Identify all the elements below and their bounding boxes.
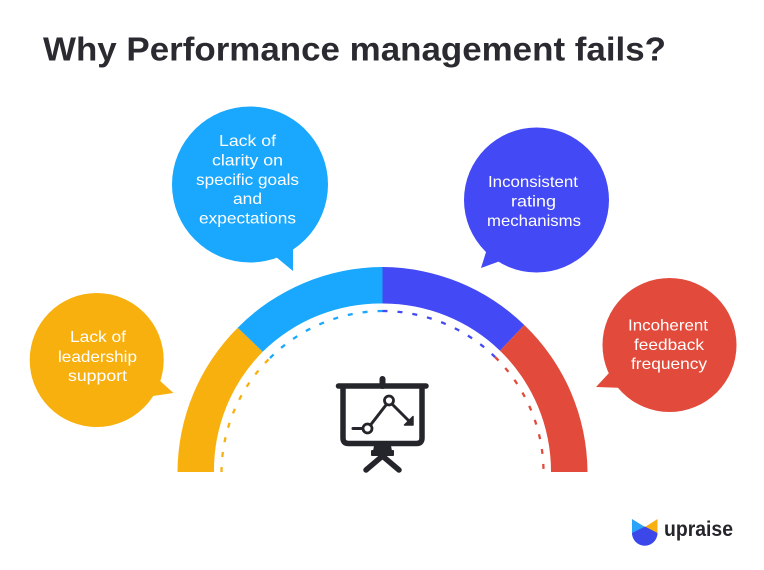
bubble: lack of clarity: Lack of: [219, 133, 277, 150]
bubble: lack of clarity: and: [233, 191, 262, 208]
title: Why Performance management fails?: [43, 32, 666, 68]
logo: upraise: [632, 518, 733, 546]
bubble: lack of clarity: clarity on: [212, 152, 283, 170]
bubble: lack of clarity: specific goals: [196, 172, 299, 189]
bubble: lack of clarity: [172, 106, 328, 271]
bubble: lack of clarity: expectations: [199, 210, 296, 228]
bubble: lack of leadership support: support: [68, 368, 128, 385]
bubble: incoherent feedback: [596, 278, 736, 412]
semicircle gauge: [178, 267, 588, 472]
bubble: lack of leadership support: [30, 293, 174, 427]
bubble: incoherent feedback: Incoherent: [628, 318, 709, 334]
bubble: incoherent feedback: frequency: [631, 356, 707, 373]
bubble: inconsistent rating: Inconsistent: [488, 174, 579, 191]
bubble: inconsistent rating: rating: [511, 194, 556, 210]
logo: upraise: upraise: [664, 518, 733, 541]
bubble: inconsistent rating: [464, 128, 609, 272]
bubble: lack of leadership support: leadership: [58, 349, 137, 366]
dashed inner arc: [222, 311, 544, 472]
bubble: lack of leadership support: Lack of: [70, 329, 127, 346]
bubble: inconsistent rating: mechanisms: [487, 213, 581, 230]
bubble: incoherent feedback: feedback: [634, 337, 705, 354]
icon: presentation board: [338, 379, 426, 470]
